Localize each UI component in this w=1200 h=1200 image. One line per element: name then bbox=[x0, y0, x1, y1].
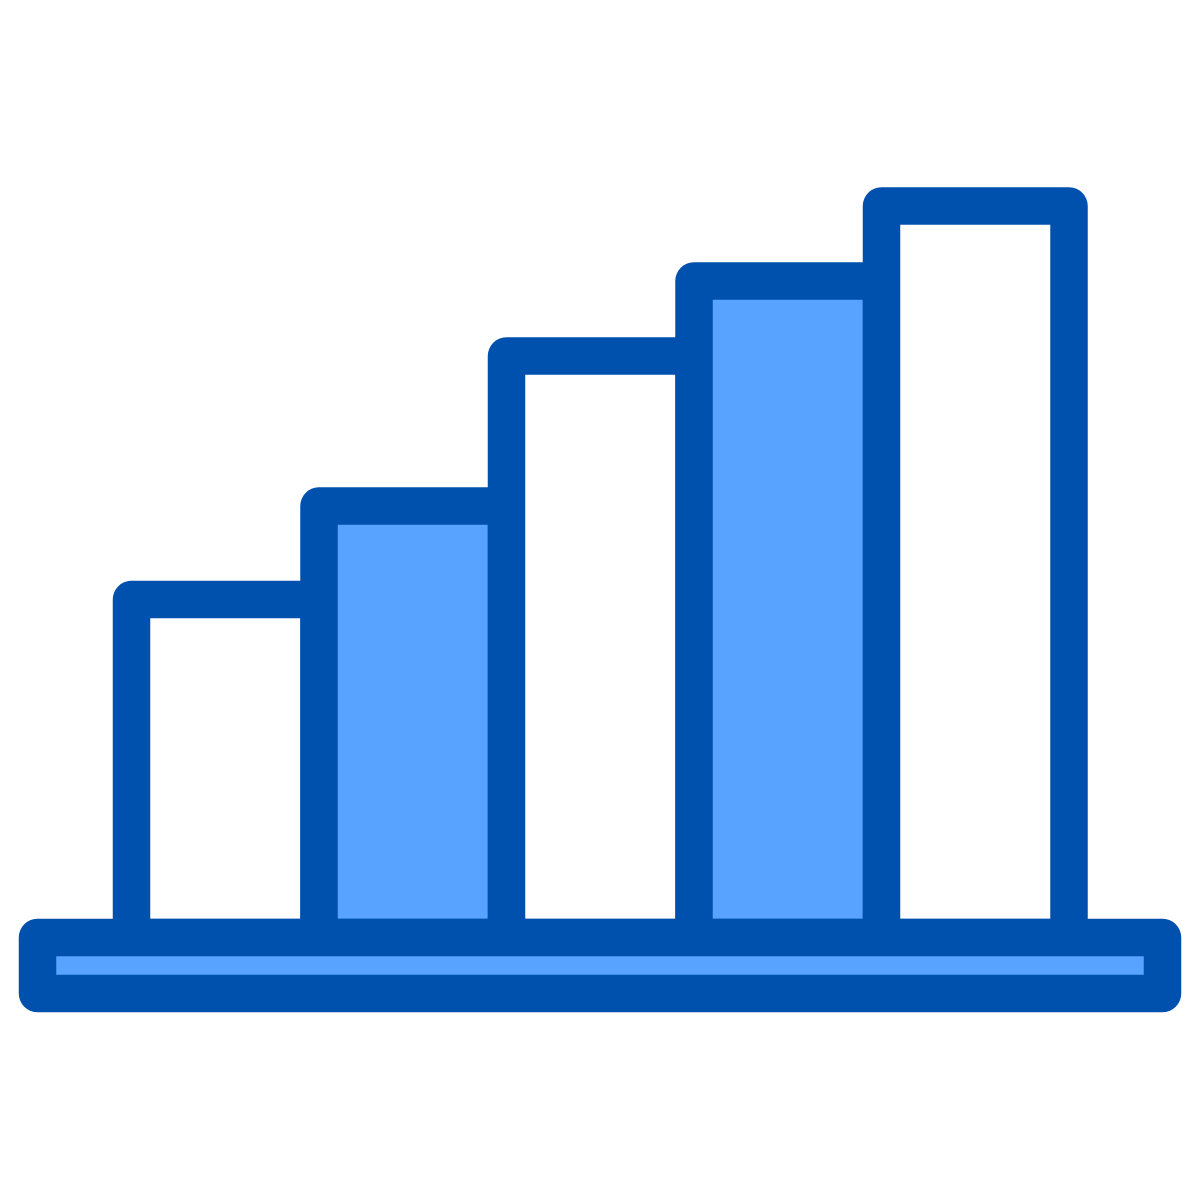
bar 5 bbox=[882, 206, 1069, 938]
bar 4 bbox=[694, 281, 882, 938]
bar 1 bbox=[132, 600, 319, 938]
bar 3 bbox=[506, 356, 694, 938]
bar 2 bbox=[319, 506, 506, 938]
base shelf bbox=[38, 938, 1162, 994]
